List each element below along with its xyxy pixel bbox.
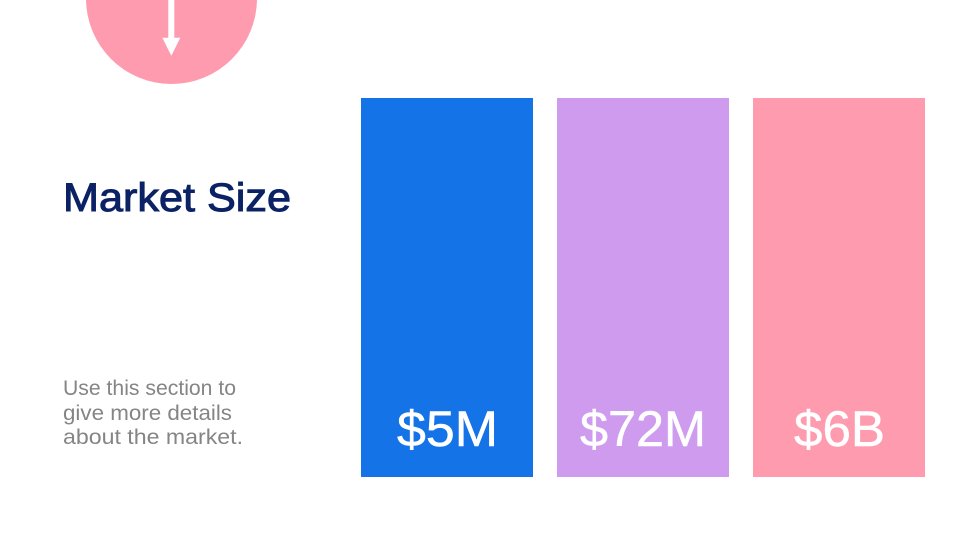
text block: market description: about the market. [63,425,243,449]
icon: pink circle with down arrow [86,0,257,84]
text block: market description: give more details [63,401,232,425]
value: $5M: $5M [397,401,498,457]
panel: $72M purple bar [557,98,729,477]
panel: $5M blue bar [361,98,533,477]
text block: market description [63,376,243,449]
text block: market description: Use this section to [63,376,236,400]
heading: Market Size: Market Size [63,176,291,220]
panel: $6B pink bar [753,98,925,477]
value: $6B: $6B [794,401,885,457]
value: $72M: $72M [580,401,706,457]
